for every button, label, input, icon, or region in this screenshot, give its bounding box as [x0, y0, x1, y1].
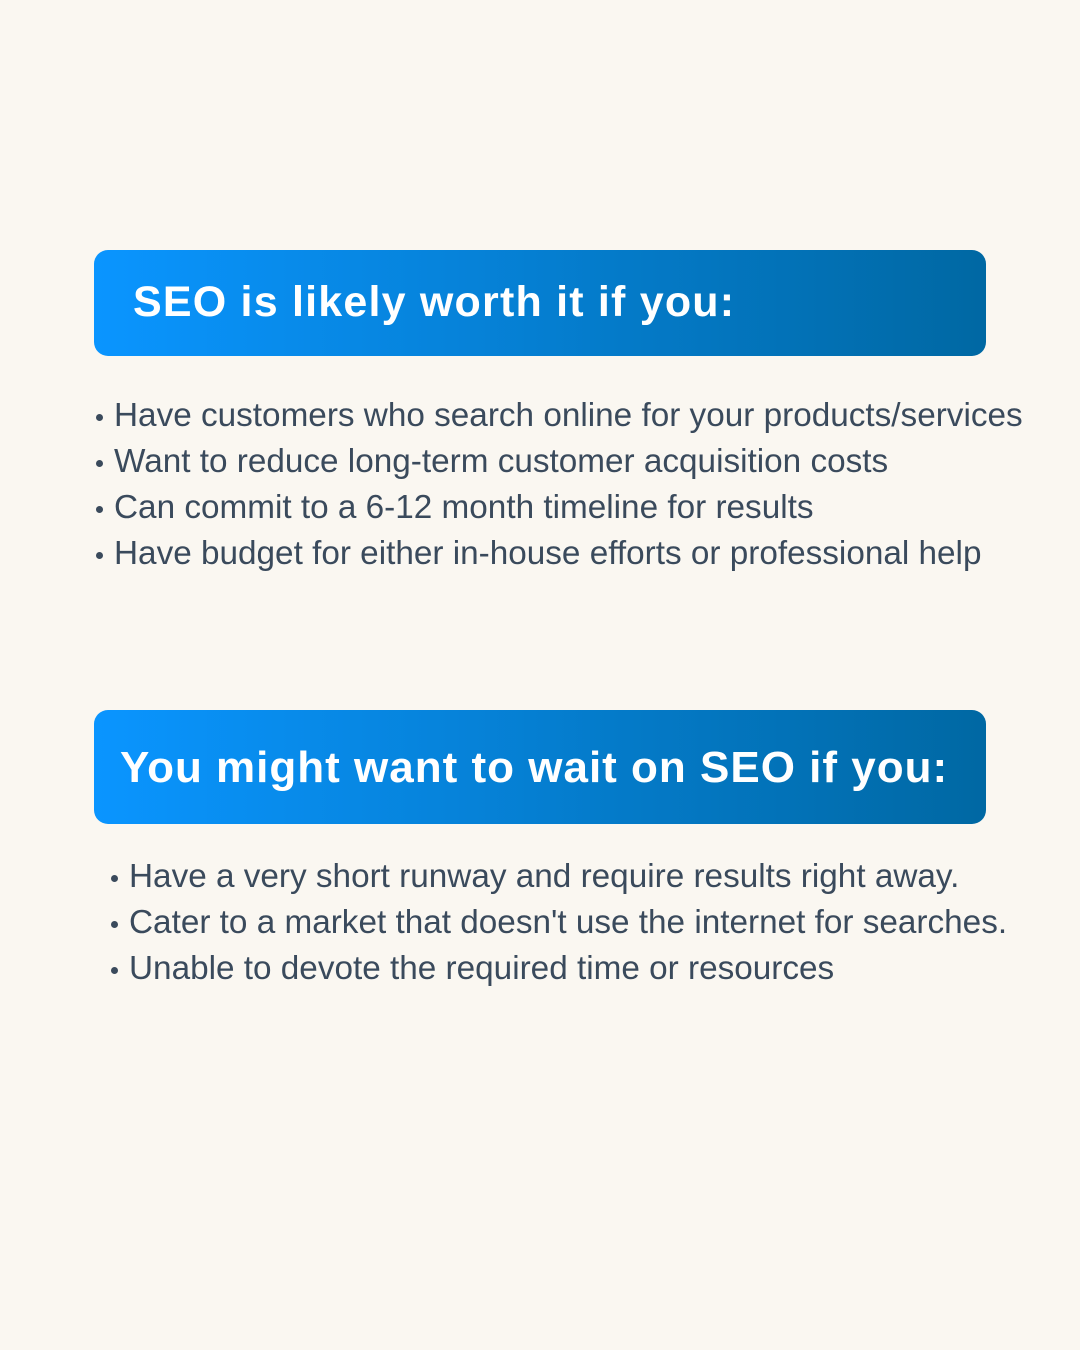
- header: SEO worth it: SEO is likely worth it if you:: [133, 278, 735, 326]
- list: worth it reasons: Have customers who search online for your products/services: [114, 397, 1023, 434]
- list: wait reasons: [111, 858, 1007, 987]
- list: worth it reasons: [96, 397, 1023, 572]
- list: wait reasons: Cater to a market that doesn't use the internet for searches.: [129, 904, 1007, 941]
- list: wait reasons: Unable to devote the required time or resources: [129, 950, 834, 987]
- header: wait on SEO: [94, 710, 986, 824]
- header: SEO worth it: [94, 250, 986, 356]
- list: worth it reasons: Want to reduce long-term customer acquisition costs: [114, 443, 888, 480]
- header: wait on SEO: You might want to wait on SEO if you:: [120, 743, 948, 792]
- list: wait reasons: Have a very short runway and require results right away.: [129, 858, 959, 895]
- list: worth it reasons: Have budget for either in-house efforts or professional help: [114, 535, 981, 572]
- list: worth it reasons: Can commit to a 6-12 month timeline for results: [114, 489, 814, 526]
